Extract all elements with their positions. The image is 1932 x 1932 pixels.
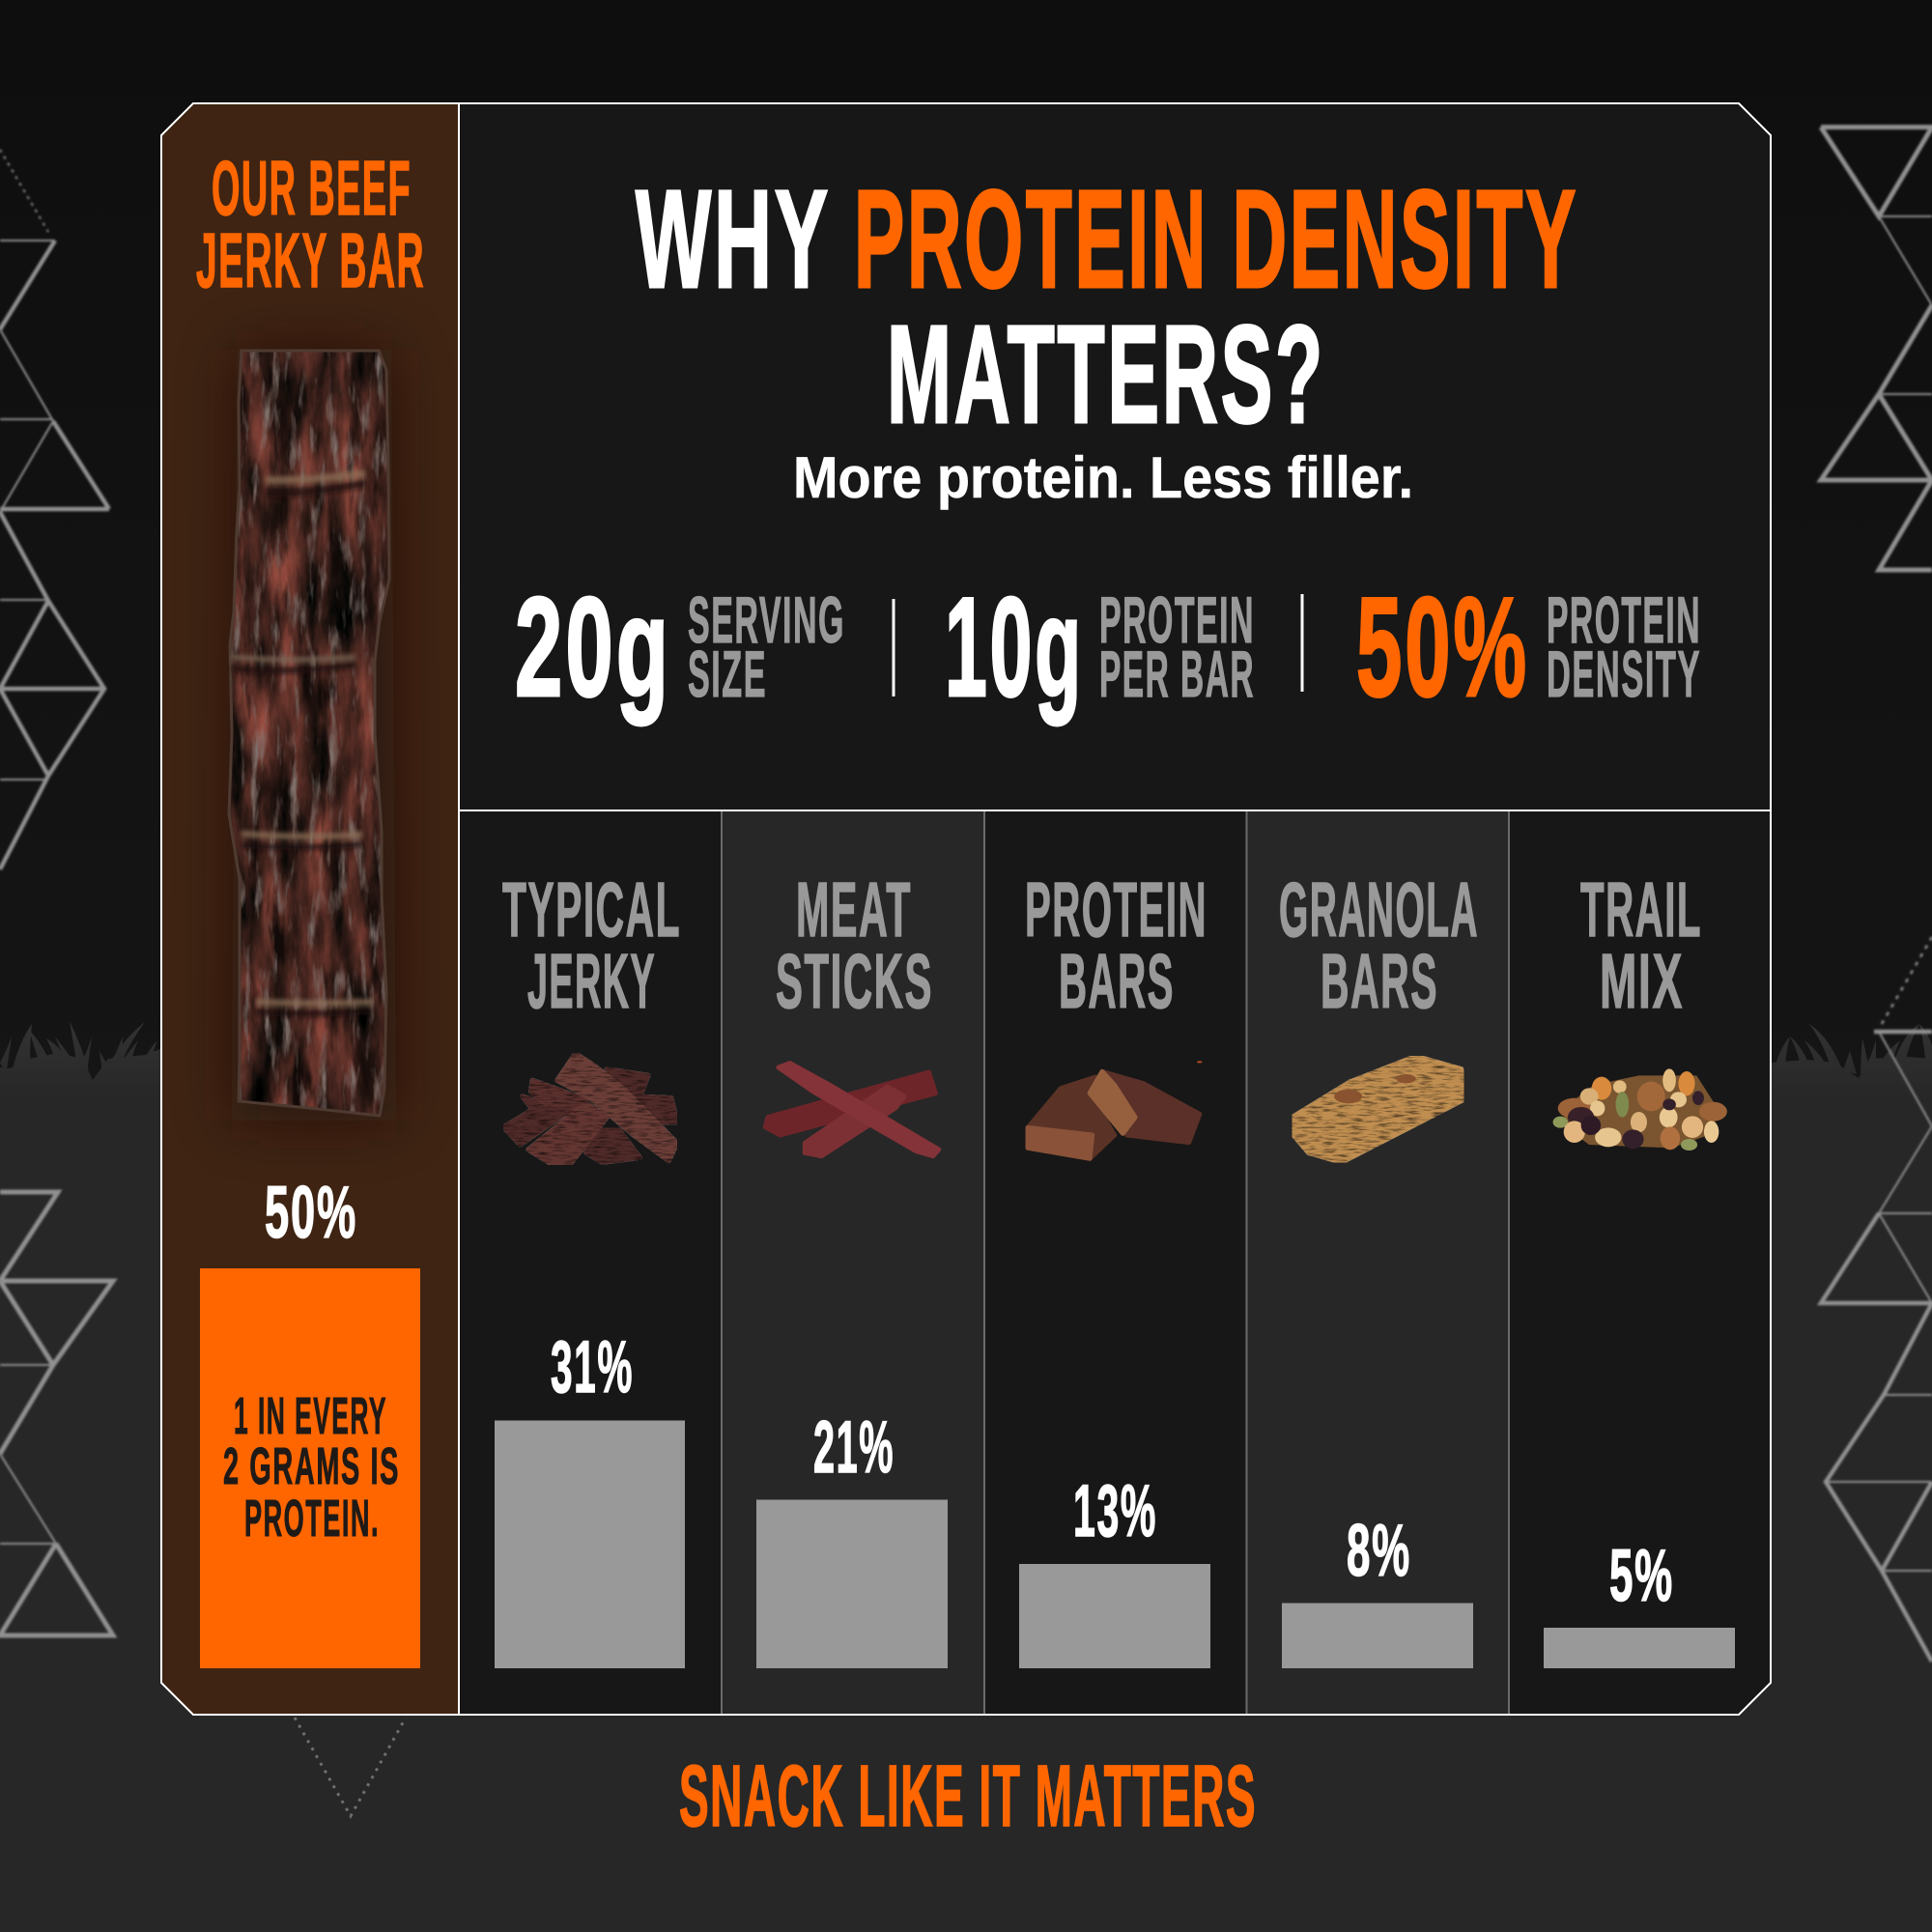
footer tagline: SNACK LIKE IT MATTERS [679,1748,1257,1845]
column: meat sticks: MEAT [796,867,912,952]
panel frame [161,103,1771,1715]
bar: typical jerky 31%: 31% [551,1326,634,1408]
infographic canvas: PER BAR [1099,638,1255,711]
bar: meat sticks 21%: 21% [813,1406,895,1489]
bar chart: protein density comparison [495,1326,1735,1668]
bar: typical jerky 31% [495,1326,685,1668]
background triangle pattern: right bottom [1821,937,1932,1662]
icon: protein bar [1028,1061,1202,1158]
background dotted triangle under panel [295,1718,406,1816]
background triangle pattern: left bottom [0,1192,113,1635]
column: protein bars [1025,867,1208,1158]
heading: our beef jerky bar [196,145,425,303]
subtitle: More protein. Less filler. [793,445,1413,510]
column: granola bars [1279,867,1479,1162]
bar: granola bars 8% [1282,1510,1473,1668]
column dividers [722,811,1509,1715]
stat: 20g serving size: SERVING [688,583,845,657]
panel fill [161,103,1771,1715]
bar: granola bars 8%: 8% [1347,1510,1411,1592]
callout: 1 in every 2 grams is protein: PROTEIN. [244,1490,380,1548]
jerky seams [232,473,372,1013]
infographic canvas: GRANOLA [1279,867,1479,952]
column: protein bars: PROTEIN [1025,867,1208,952]
title [636,161,1578,452]
jerky shadow [232,350,396,1121]
column: typical jerky [502,867,681,1165]
stat: our bar 50%: 50% [265,1172,357,1254]
infographic canvas: PROTEIN [1547,583,1701,657]
column: protein bars: BARS [1059,938,1175,1024]
icon: trail mix [1553,1068,1727,1151]
icon: meat sticks [765,1064,939,1156]
icon: granola bar [1293,1056,1463,1162]
callout: 1 in every 2 grams is protein: 2 GRAMS IS [223,1437,400,1495]
callout: 1 in every 2 grams is protein: 1 IN EVERY [234,1387,387,1445]
panel: our beef jerky bar column [161,103,1771,1715]
bar: trail mix 5% [1544,1535,1735,1668]
bar: protein bars 13%: 13% [1073,1470,1157,1552]
heading: our beef jerky bar: OUR BEEF [212,145,412,231]
grass silhouette left [0,1021,160,1096]
background triangle pattern: left top [0,150,109,869]
column: trail mix: TRAIL [1580,867,1702,952]
infographic canvas: PROTEIN [1099,583,1255,657]
main panel [161,103,1771,1715]
background triangle pattern: right top [1821,128,1932,570]
bar: meat sticks 21% [756,1406,948,1668]
title: MATTERS? [887,297,1325,452]
stat: 20g serving size: 20g [515,568,671,725]
stat: 20g serving size: SIZE [688,638,767,711]
grass silhouette right [1772,1024,1932,1096]
icon: jerky strips [503,1054,677,1165]
infographic canvas: JERKY BAR [196,217,425,303]
stat: 50% protein density: DENSITY [1547,638,1701,711]
bar: trail mix 5%: 5% [1609,1535,1674,1617]
column: typical jerky: JERKY [527,938,656,1024]
column: meat sticks [765,867,939,1156]
title: WHY [636,161,831,317]
image: beef jerky bar [229,351,389,1116]
column: typical jerky: TYPICAL [502,867,681,952]
column: granola bars: BARS [1321,938,1438,1024]
column: trail mix [1553,867,1727,1151]
column: trail mix: MIX [1600,938,1684,1024]
jerky outline [229,351,389,1116]
bar: protein bars 13% [1019,1470,1210,1668]
comparison column backgrounds [723,811,1508,1714]
stat: 50% protein density: 50% [1356,568,1529,725]
callout: 1 in every 2 grams is protein [200,1268,420,1668]
column: meat sticks: STICKS [776,938,933,1024]
stat: 10g protein per bar: 10g [945,568,1084,725]
